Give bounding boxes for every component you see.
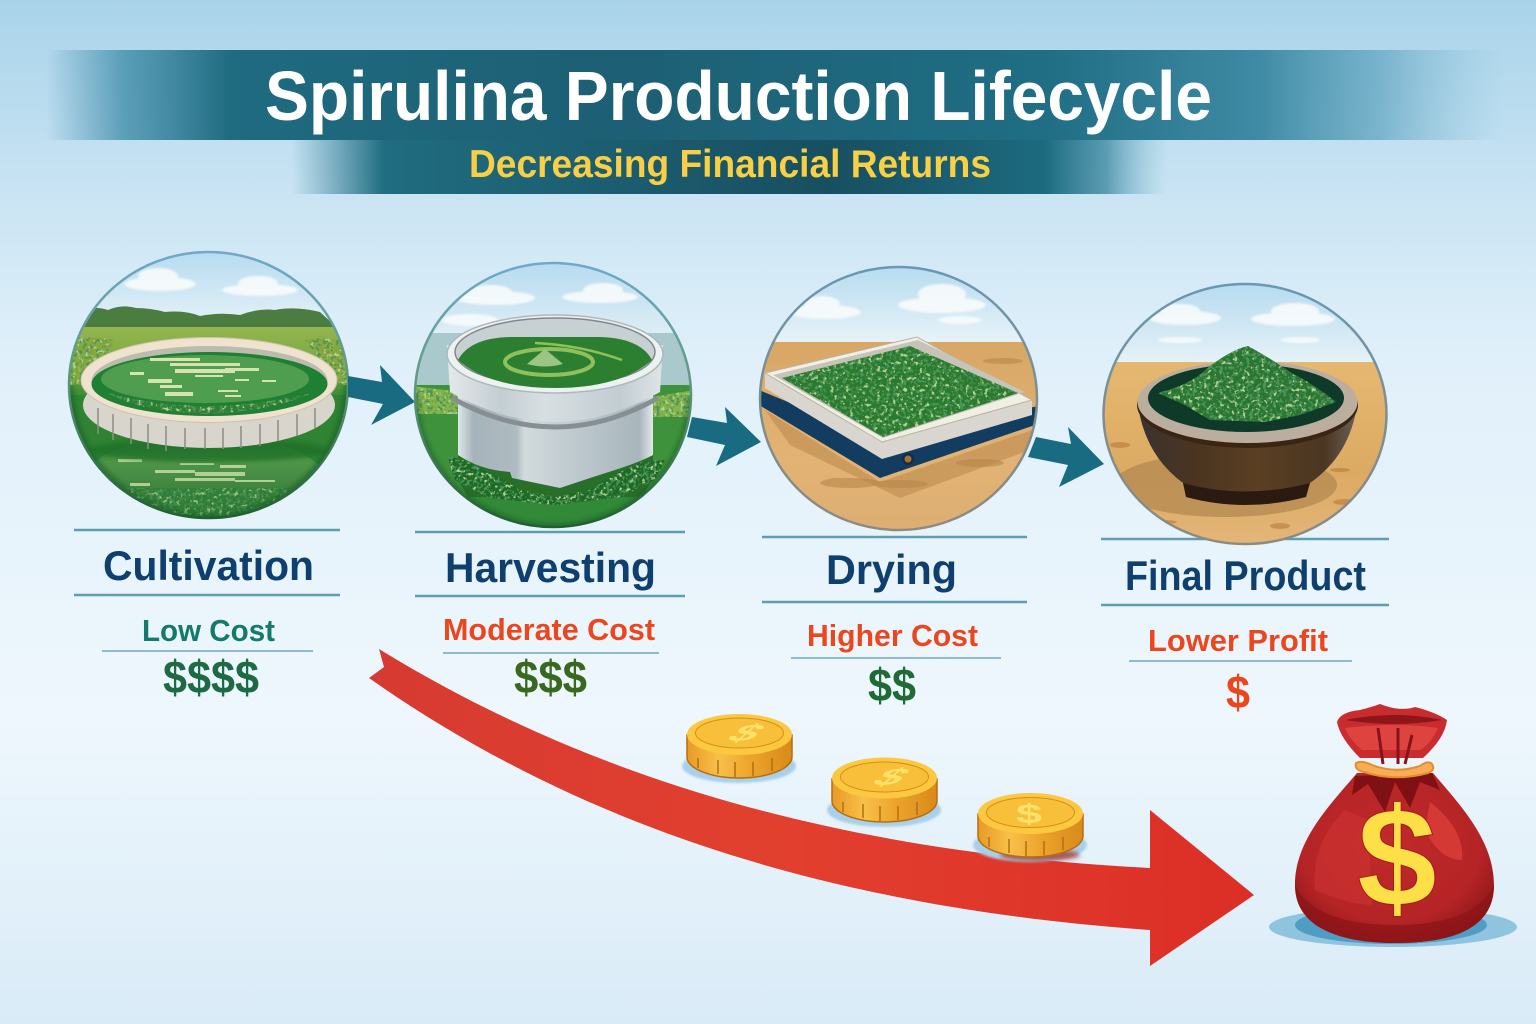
arrow: drying to final product	[1028, 427, 1104, 487]
label: low cost: Low Cost	[142, 613, 275, 648]
label: moderate cost: Moderate Cost	[443, 612, 655, 647]
panel: final product	[1100, 280, 1390, 718]
panel: harvesting	[410, 258, 700, 703]
divider lines and heading: Cultivation	[74, 530, 340, 595]
illustration: open pond	[65, 248, 355, 525]
icon: money bag: $	[1357, 778, 1437, 936]
panel: drying	[755, 262, 1045, 711]
illustration: drying tray	[755, 262, 1045, 537]
icon: coin 2: $	[863, 764, 920, 790]
title: Spirulina Production Lifecycle	[265, 57, 1212, 135]
icon: coin 1: $	[718, 720, 775, 746]
icon: money bag	[1269, 704, 1517, 947]
divider lines and heading: Final Product	[1101, 539, 1389, 605]
value: one dollar: $	[1226, 666, 1250, 718]
divider lines and heading: Final Product: Final Product	[1125, 552, 1366, 599]
title banner	[30, 50, 1510, 194]
illustration: harvesting tank	[410, 258, 700, 532]
divider lines and heading: Drying: Drying	[826, 546, 957, 593]
value: four dollars: $$$$	[163, 651, 259, 703]
label: lower profit: Lower Profit	[1148, 623, 1328, 658]
icon: coin 1	[682, 714, 796, 783]
divider lines and heading: Drying	[762, 537, 1027, 602]
icon: coin 3	[973, 793, 1087, 862]
icon: coin 3: $	[1016, 799, 1042, 829]
divider lines and heading: Harvesting: Harvesting	[445, 544, 656, 591]
divider lines and heading: Harvesting	[415, 532, 685, 596]
value: two dollars: $$	[868, 659, 916, 711]
subtitle: Decreasing Financial Returns	[469, 143, 991, 186]
icon: coin 2	[827, 758, 941, 827]
label: higher cost: Higher Cost	[807, 618, 978, 653]
divider lines and heading: Cultivation: Cultivation	[103, 542, 314, 589]
value: three dollars: $$$	[514, 651, 587, 703]
arrow: cultivation to harvesting	[348, 365, 415, 425]
illustration: bowl of powder	[1100, 280, 1390, 547]
arrow: harvesting to drying	[687, 407, 761, 466]
panel: cultivation	[65, 248, 355, 703]
arrow: declining returns	[369, 649, 1254, 966]
